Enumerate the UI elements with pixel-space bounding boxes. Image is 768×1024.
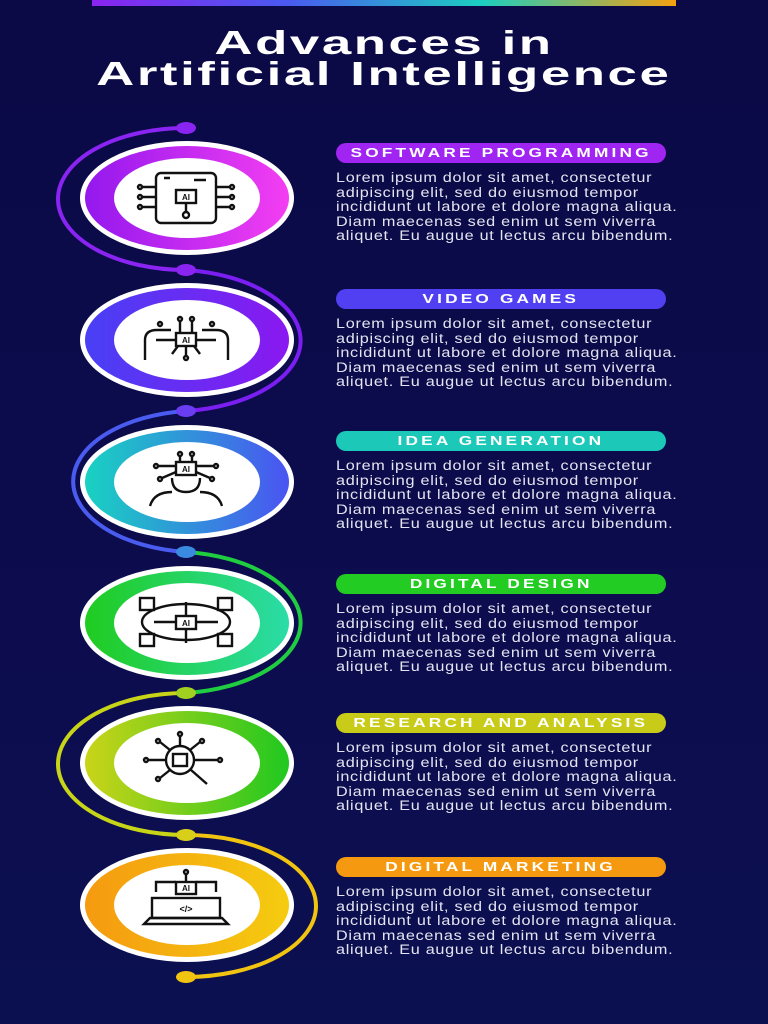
- icon: digital design: [140, 598, 232, 646]
- icon: digital design: AI: [182, 619, 190, 628]
- icon: software programming phone chip: AI: [182, 193, 190, 202]
- section 5: research and analysis: [336, 713, 677, 813]
- text: incididunt ut labore et dolore magna aliqua.: [336, 630, 677, 645]
- icon: video games: AI: [182, 336, 190, 345]
- text: aliquet. Eu augue ut lectus arcu bibendum.: [336, 374, 673, 389]
- text: adipiscing elit, sed do eiusmod tempor: [336, 472, 639, 488]
- text: aliquet. Eu augue ut lectus arcu bibendum.: [336, 659, 673, 674]
- text: [336, 170, 677, 243]
- pill label: VIDEO GAMES: [423, 292, 579, 306]
- circle 5: [80, 706, 294, 820]
- icon: digital marketing laptop: AI: [182, 884, 190, 893]
- text: Diam maecenas sed enim ut sem viverra: [336, 360, 656, 374]
- icon: idea generation head: AI: [182, 465, 190, 474]
- text: adipiscing elit, sed do eiusmod tempor: [336, 184, 639, 200]
- pill label: [336, 857, 666, 877]
- text: Diam maecenas sed enim ut sem viverra: [336, 502, 656, 516]
- text: [336, 884, 677, 957]
- title: Advances in: [214, 24, 554, 61]
- pill label: [336, 143, 666, 163]
- text: aliquet. Eu augue ut lectus arcu bibendum.: [336, 516, 673, 531]
- pill label: SOFTWARE PROGRAMMING: [350, 146, 652, 160]
- text: adipiscing elit, sed do eiusmod tempor: [336, 330, 639, 346]
- pill label: [336, 713, 666, 733]
- icon: research and analysis: [144, 732, 222, 784]
- icon: idea generation head: [150, 452, 222, 506]
- text: adipiscing elit, sed do eiusmod tempor: [336, 754, 639, 770]
- pill label: RESEARCH AND ANALYSIS: [354, 716, 648, 730]
- circle 3: [80, 425, 294, 539]
- icons: [138, 173, 234, 924]
- text: incididunt ut labore et dolore magna aliqua.: [336, 769, 677, 784]
- circles: [80, 141, 294, 962]
- title: Artificial Intelligence: [96, 55, 672, 92]
- section 1: software programming: [336, 143, 677, 243]
- title: [96, 24, 672, 92]
- pill label: [336, 289, 666, 309]
- text: Lorem ipsum dolor sit amet, consectetur: [336, 170, 652, 185]
- icon: video games: [145, 317, 228, 360]
- section 4: digital design: [336, 574, 677, 674]
- text: incididunt ut labore et dolore magna aliqua.: [336, 199, 677, 214]
- text: Lorem ipsum dolor sit amet, consectetur: [336, 884, 652, 899]
- pill label: IDEA GENERATION: [398, 434, 604, 448]
- pill label: [336, 431, 666, 451]
- text: Diam maecenas sed enim ut sem viverra: [336, 644, 656, 660]
- circle 1: [80, 141, 294, 255]
- text: Diam maecenas sed enim ut sem viverra: [336, 784, 656, 798]
- text: Lorem ipsum dolor sit amet, consectetur: [336, 316, 652, 331]
- text: incididunt ut labore et dolore magna aliqua.: [336, 487, 677, 502]
- section 6: digital marketing: [336, 857, 677, 957]
- text: [336, 316, 677, 389]
- circle 4: [80, 566, 294, 680]
- top gradient bar: [92, 0, 676, 6]
- connector arcs: [58, 128, 316, 977]
- text: [336, 740, 677, 813]
- section 2: video games: [336, 289, 677, 389]
- text: adipiscing elit, sed do eiusmod tempor: [336, 616, 639, 630]
- pill label: DIGITAL MARKETING: [386, 860, 616, 874]
- text: Diam maecenas sed enim ut sem viverra: [336, 214, 656, 228]
- icon: digital marketing laptop: </>: [179, 904, 193, 914]
- text: Lorem ipsum dolor sit amet, consectetur: [336, 601, 652, 616]
- connector dots: [176, 122, 196, 983]
- text: [336, 601, 677, 674]
- icon: software programming phone chip: [138, 173, 234, 223]
- section 3: idea generation: [336, 431, 677, 531]
- text: incididunt ut labore et dolore magna aliqua.: [336, 913, 677, 928]
- pill label: [336, 574, 666, 594]
- text: Lorem ipsum dolor sit amet, consectetur: [336, 740, 652, 755]
- text: [336, 458, 677, 531]
- text: Lorem ipsum dolor sit amet, consectetur: [336, 458, 652, 473]
- text: aliquet. Eu augue ut lectus arcu bibendum.: [336, 228, 673, 243]
- text: aliquet. Eu augue ut lectus arcu bibendum.: [336, 942, 673, 957]
- text: aliquet. Eu augue ut lectus arcu bibendum.: [336, 798, 673, 813]
- text: incididunt ut labore et dolore magna aliqua.: [336, 345, 677, 360]
- circle 2: [80, 283, 294, 397]
- icon: digital marketing laptop: [144, 870, 228, 924]
- circle 6: [80, 848, 294, 962]
- pill label: DIGITAL DESIGN: [410, 577, 592, 591]
- text: adipiscing elit, sed do eiusmod tempor: [336, 898, 639, 914]
- text: Diam maecenas sed enim ut sem viverra: [336, 928, 656, 942]
